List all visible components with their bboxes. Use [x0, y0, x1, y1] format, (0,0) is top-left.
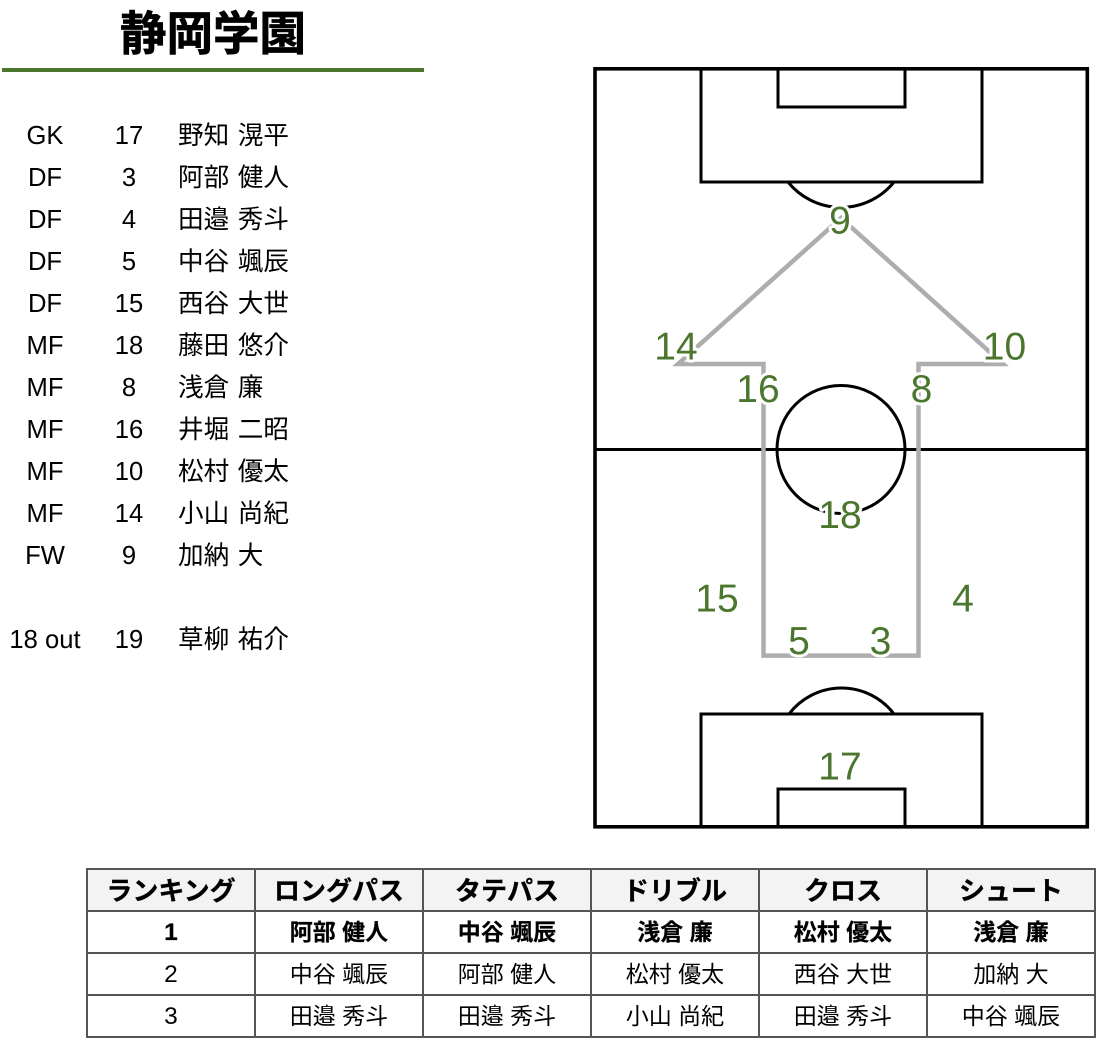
title: 静岡学園 — [120, 8, 306, 60]
roster row: MF 10 — [27, 458, 289, 486]
roster row: MF 16: MF — [27, 416, 63, 444]
roster row: MF 8: MF — [27, 374, 63, 402]
formation outline arrow — [678, 218, 1003, 656]
table header: ロングパス — [274, 876, 404, 906]
roster row: DF 15: DF — [28, 290, 62, 318]
table header: シュート — [959, 876, 1063, 906]
rank 1 row: 浅倉 廉 — [973, 919, 1049, 945]
rank 1 row: 1 — [164, 919, 178, 946]
roster row: substitution: 草柳 祐介 — [178, 626, 289, 654]
roster row: GK 17: 野知 滉平 — [178, 122, 289, 150]
roster row: DF 5: DF — [28, 248, 62, 276]
player numbers: 5 — [788, 620, 810, 663]
player numbers: 10 — [983, 326, 1026, 368]
roster row: substitution — [9, 626, 289, 654]
rank 1 row — [164, 919, 1049, 946]
roster row: MF 10: 松村 優太 — [178, 458, 289, 486]
roster row: DF 4: DF — [28, 206, 62, 234]
table header — [88, 870, 1094, 1030]
rank 2 row: 加納 大 — [973, 961, 1049, 987]
roster row: DF 15: 西谷 大世 — [178, 290, 289, 318]
pitch markings — [595, 69, 1087, 827]
roster row: MF 8: 8 — [122, 374, 136, 402]
roster row: MF 8 — [27, 374, 263, 402]
rank 3 row: 中谷 颯辰 — [962, 1003, 1060, 1029]
roster row: DF 3: DF — [28, 164, 62, 192]
rank 3 row: 小山 尚紀 — [626, 1003, 724, 1029]
roster row: MF 14: MF — [27, 500, 63, 528]
roster row: MF 16: 16 — [115, 416, 143, 444]
roster row: DF 4 — [28, 206, 289, 234]
roster row: DF 5 — [28, 248, 289, 276]
roster row: MF 16 — [27, 416, 289, 444]
roster row: substitution: 19 — [115, 626, 143, 654]
roster row: FW 9: FW — [25, 542, 65, 570]
roster row: MF 14 — [27, 500, 289, 528]
rank 1 row: 浅倉 廉 — [637, 919, 713, 945]
player numbers: 16 — [736, 368, 780, 411]
roster row: MF 14: 14 — [115, 500, 143, 528]
roster row: DF 15: 15 — [115, 290, 143, 318]
roster row: DF 5: 中谷 颯辰 — [178, 248, 289, 276]
roster row: GK 17 — [26, 122, 289, 150]
table header: タテパス — [455, 876, 559, 906]
rank 2 row: 阿部 健人 — [458, 961, 556, 987]
roster row: MF 8: 浅倉 廉 — [178, 374, 263, 402]
rank 3 row — [164, 1003, 1060, 1030]
roster row: FW 9: 9 — [122, 542, 136, 570]
roster row: GK 17: 17 — [115, 122, 143, 150]
rank 1 row: 松村 優太 — [794, 919, 892, 945]
roster row: MF 16: 井堀 二昭 — [178, 416, 289, 444]
rank 2 row: 2 — [164, 961, 178, 988]
roster row: GK 17: GK — [26, 122, 63, 150]
rank 2 row: 松村 優太 — [626, 961, 724, 987]
player numbers: 18 — [818, 494, 862, 537]
player numbers: 4 — [952, 578, 974, 620]
player numbers: 15 — [695, 578, 739, 620]
rank 3 row: 田邉 秀斗 — [794, 1003, 892, 1029]
player numbers: 17 — [818, 746, 862, 788]
player numbers — [654, 200, 1026, 788]
roster row: substitution: 18 out — [9, 626, 81, 654]
roster row: MF 14: 小山 尚紀 — [178, 500, 289, 528]
table header: ランキング — [106, 876, 236, 906]
roster list — [9, 122, 289, 654]
ranking table — [86, 868, 1096, 1038]
roster row: DF 5: 5 — [122, 248, 136, 276]
roster row: DF 3: 3 — [122, 164, 136, 192]
roster row: DF 4: 4 — [122, 206, 136, 234]
roster row: MF 18 — [27, 332, 289, 360]
roster row: FW 9 — [25, 542, 263, 570]
player numbers: 8 — [911, 368, 932, 411]
roster row: DF 3: 阿部 健人 — [178, 164, 289, 192]
roster row: FW 9: 加納 大 — [178, 542, 263, 570]
rank 2 row — [164, 961, 1049, 988]
roster row: MF 18: 藤田 悠介 — [178, 332, 289, 360]
rank 2 row: 西谷 大世 — [794, 961, 892, 987]
roster row: DF 4: 田邉 秀斗 — [178, 206, 289, 234]
rank 3 row: 田邉 秀斗 — [458, 1003, 556, 1029]
rank 1 row: 阿部 健人 — [290, 919, 388, 945]
rank 2 row: 中谷 颯辰 — [290, 961, 388, 987]
rank 1 row: 中谷 颯辰 — [458, 919, 556, 945]
roster row: MF 10: MF — [27, 458, 63, 486]
table header: ドリブル — [623, 876, 727, 906]
roster row: MF 18: MF — [27, 332, 63, 360]
player numbers: 14 — [654, 326, 698, 368]
roster row: MF 10: 10 — [115, 458, 143, 486]
roster row: DF 15 — [28, 290, 289, 318]
rank 3 row: 田邉 秀斗 — [290, 1003, 388, 1029]
title underline — [2, 68, 424, 72]
rank 3 row: 3 — [164, 1003, 178, 1030]
roster row: DF 3 — [28, 164, 289, 192]
player numbers: 3 — [870, 620, 891, 663]
player numbers: 9 — [829, 200, 851, 242]
table header: クロス — [804, 876, 882, 906]
roster row: MF 18: 18 — [115, 332, 143, 360]
